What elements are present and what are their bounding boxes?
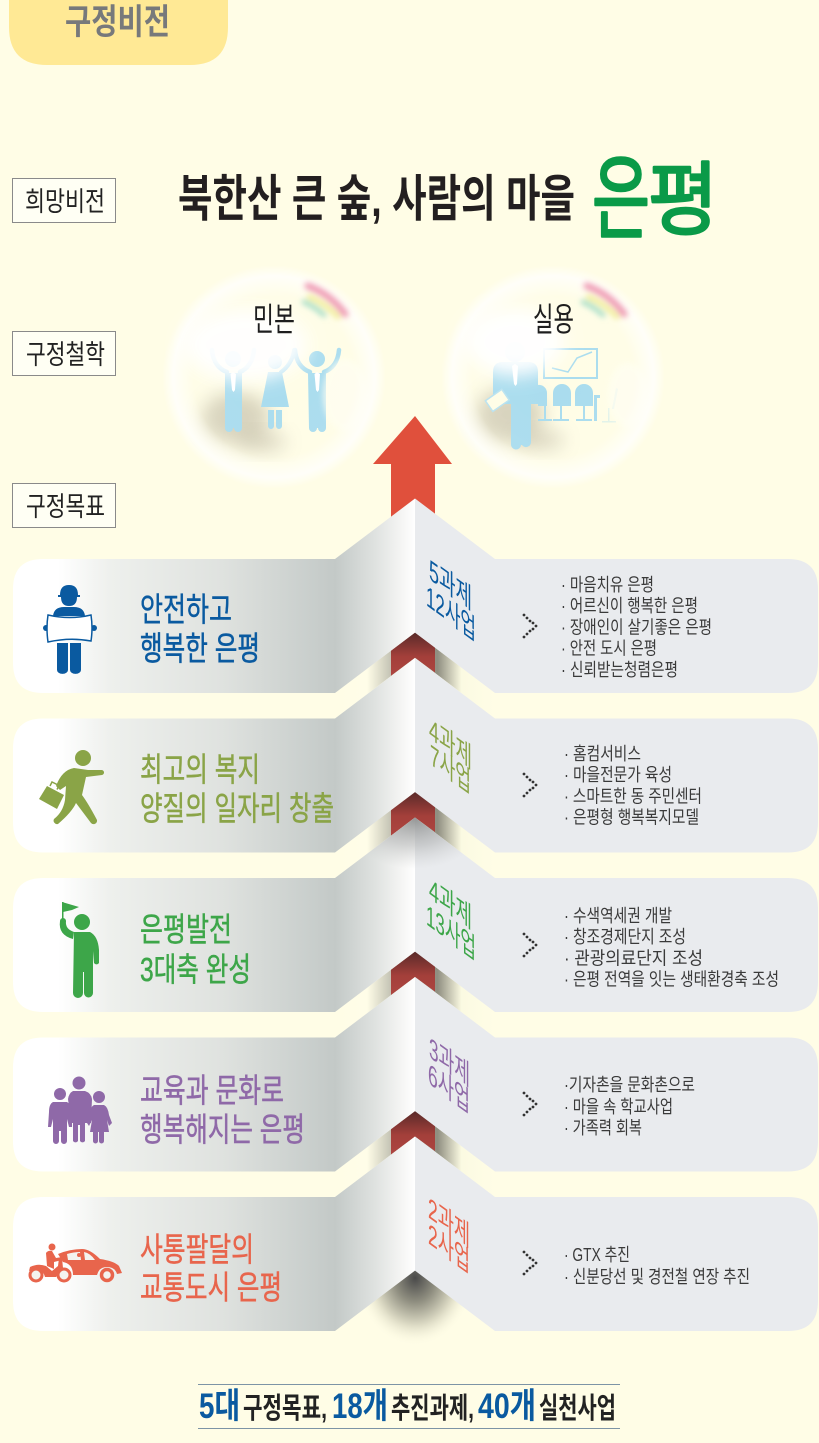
count label: 5과제 (429, 553, 472, 616)
heading (140, 1231, 282, 1306)
car body (58, 1249, 122, 1275)
heading: 최고의 복지 (140, 751, 260, 788)
list: · 장애인이 살기좋은 은평 (561, 617, 712, 637)
row 1 connector (335, 632, 495, 718)
heading: 행복한 은평 (140, 630, 260, 667)
bubble: 실용 (441, 265, 665, 489)
section tab: 구정비전: 구정비전 (65, 3, 170, 42)
dotted chevron (523, 773, 537, 797)
list (564, 906, 779, 990)
footer summary: 5대 (199, 1387, 240, 1426)
shadow below bottom fold (357, 1210, 473, 1346)
arrow: red upward arrow (373, 416, 452, 530)
count label: 4과제 (429, 872, 472, 935)
list: · 가족력 회복 (564, 1118, 642, 1138)
list: · 은평형 행복복지모델 (564, 808, 699, 828)
list (564, 744, 702, 828)
count label: 2사업 (428, 1217, 470, 1279)
label: 희망비전 (12, 178, 116, 222)
footer summary (198, 1384, 620, 1429)
panel: goal 4 (13, 977, 818, 1172)
icon: man with flag (60, 902, 99, 998)
label: 희망비전: 희망비전 (25, 187, 105, 217)
fold shadow (376, 818, 456, 863)
list: · 마을 속 학교사업 (564, 1097, 673, 1117)
count label (428, 1191, 470, 1279)
list: · 마을전문가 육성 (564, 765, 672, 785)
motorcycle (29, 1258, 63, 1277)
list (564, 1245, 750, 1287)
footer summary: 실천사업 (539, 1392, 616, 1425)
list: · 어르신이 행복한 은평 (561, 596, 698, 616)
list: · 수색역세권 개발 (564, 906, 672, 926)
list: · 관광의료단지 조성 (564, 948, 703, 968)
heading: 교통도시 은평 (140, 1269, 282, 1306)
list: ·기자촌을 문화촌으로 (564, 1075, 695, 1095)
icon: worker holding plan (43, 585, 97, 674)
footer summary: 18개 (332, 1387, 388, 1426)
icon: walking man with briefcase (39, 750, 104, 824)
icon: three people with raised arms (212, 350, 339, 432)
count label (429, 712, 472, 800)
count label: 3과제 (429, 1031, 470, 1093)
count label (428, 1031, 470, 1119)
logo text: 은평: 은 (592, 149, 650, 251)
rainbow highlight (304, 286, 345, 317)
list: · 마음치유 은평 (561, 575, 654, 595)
bubble: 실용: 실용 (533, 301, 574, 338)
heading (140, 751, 334, 827)
icon: family of three (48, 1076, 112, 1144)
heading: 안전하고 (140, 591, 232, 628)
row 4 connector (335, 1111, 495, 1197)
icon: motorcycle and car (29, 1244, 122, 1281)
list (564, 1075, 695, 1138)
list: · 홈컴서비스 (564, 744, 641, 764)
rainbow highlight (583, 286, 624, 317)
heading: 교육과 문화로 (140, 1072, 284, 1109)
dotted chevron (523, 1251, 537, 1275)
heading: 양질의 일자리 창출 (140, 790, 334, 827)
section tab: 구정비전 (9, 0, 228, 65)
label: 구정철학: 구정철학 (26, 340, 105, 370)
label: 구정목표: 구정목표 (26, 492, 105, 522)
dotted chevron (523, 933, 537, 957)
count label: 6사업 (428, 1057, 470, 1119)
count label: 2과제 (428, 1191, 470, 1253)
heading: 행복해지는 은평 (140, 1111, 305, 1148)
icon: presenter with board and chairs (485, 342, 618, 450)
heading: 3대축 완성 (140, 951, 251, 988)
count label: 12사업 (426, 579, 476, 647)
logo text: 은평 (592, 149, 718, 251)
panel: goal 2 (13, 658, 818, 852)
vision heading: 북한산 큰 숲, 사람의 마을 (178, 171, 575, 227)
heading: 사통팔달의 (140, 1231, 254, 1268)
panel: goal 3 (13, 818, 818, 1012)
list (561, 575, 712, 680)
bubble: 민본 (162, 265, 386, 489)
list: · 신뢰받는청렴은평 (561, 660, 678, 680)
panel: goal 1 (13, 498, 818, 693)
list: · GTX 추진 (564, 1245, 630, 1265)
row 3 connector (335, 952, 495, 1038)
dotted chevron (523, 614, 537, 638)
bubble: 민본: 민본 (253, 301, 295, 338)
heading: 은평발전 (140, 911, 232, 948)
footer summary: 추진과제, (391, 1392, 474, 1425)
count label: 7사업 (430, 738, 471, 800)
count label: 4과제 (429, 712, 472, 775)
count label: 13사업 (426, 898, 476, 966)
logo text: 은평: 평 (648, 156, 718, 245)
row 2 connector (335, 792, 495, 878)
dotted chevron (523, 1092, 537, 1116)
label: 구정목표 (12, 484, 116, 528)
footer summary: 구정목표, (243, 1393, 327, 1425)
heading (140, 591, 260, 667)
list: · 스마트한 동 주민센터 (564, 786, 702, 806)
list: · 안전 도시 은평 (561, 639, 657, 659)
heading (140, 911, 251, 988)
count label (426, 872, 476, 966)
footer summary: 40개 (478, 1387, 536, 1426)
rider (48, 1244, 56, 1250)
heading (140, 1072, 305, 1148)
label: 구정철학 (12, 332, 116, 376)
panel: goal 5 (13, 1136, 818, 1331)
list: · 창조경제단지 조성 (564, 927, 686, 947)
list: · 은평 전역을 잇는 생태환경축 조성 (564, 970, 779, 990)
list: · 신분당선 및 경전철 연장 추진 (564, 1267, 750, 1287)
count label (426, 553, 476, 647)
